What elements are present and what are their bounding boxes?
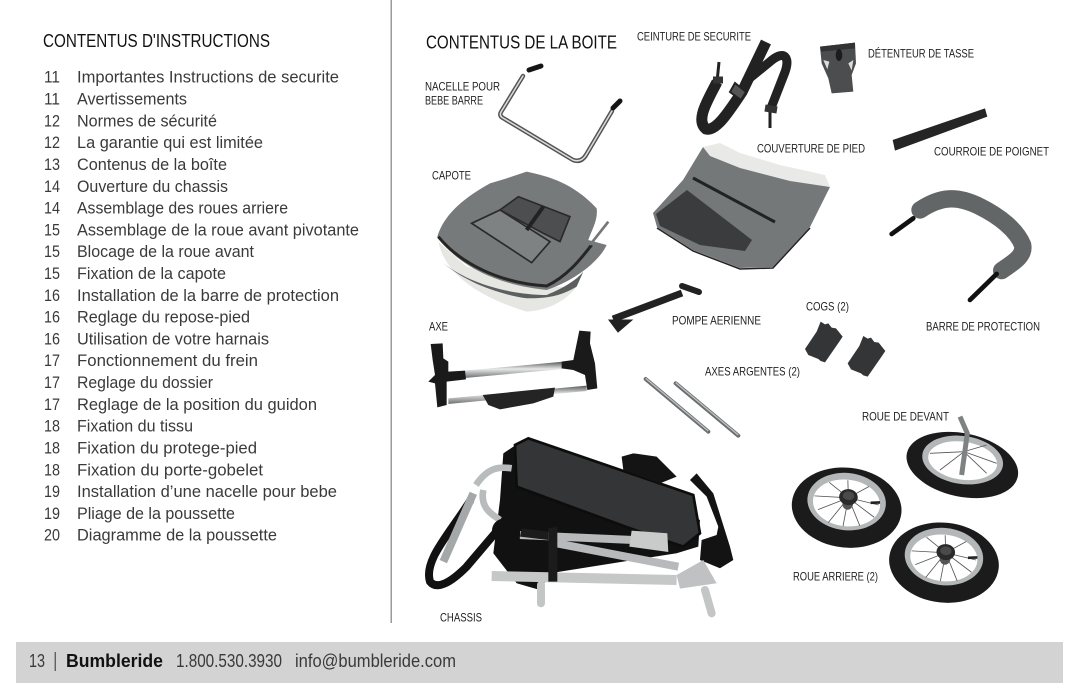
contents list: Fixation de la capote	[77, 264, 226, 283]
contents list: 12	[44, 133, 60, 152]
contents list: 15	[44, 242, 60, 261]
contents list: 13	[44, 155, 60, 174]
contents list: 19	[44, 482, 60, 501]
label: pompe aerienne: POMPE AERIENNE	[672, 314, 761, 328]
contents list: Reglage du repose-pied	[77, 308, 250, 327]
contents list: Reglage de la position du guidon	[77, 395, 317, 414]
label: nacelle pour bebe barre	[425, 80, 500, 108]
label: couverture de pied: COUVERTURE DE PIED	[757, 142, 865, 156]
contents list: 11	[44, 90, 60, 108]
phone number: 1.800.530.3930	[176, 651, 282, 671]
footer bar	[16, 642, 1063, 683]
icon: folded chassis	[429, 438, 733, 613]
contents list: Diagramme de la poussette	[77, 526, 277, 545]
contents list: Normes de sécurité	[77, 111, 217, 130]
label: roue de devant: ROUE DE DEVANT	[862, 410, 950, 424]
contents list: Pliage de la poussette	[77, 504, 235, 523]
contents list: Fixation du tissu	[77, 417, 193, 436]
label: capote: CAPOTE	[432, 168, 471, 182]
panel: table of contents	[43, 31, 359, 545]
contents list: Installation de la barre de protection	[77, 286, 339, 305]
heading: contentus de la boite: CONTENTUS DE LA BOITE	[426, 32, 617, 52]
contents list: 16	[44, 286, 60, 305]
contents list: 20	[44, 526, 60, 545]
contents list: Importantes Instructions de securite	[77, 68, 339, 87]
icon: rear wheel right	[885, 517, 1003, 608]
contents list: Blocage de la roue avant	[77, 242, 254, 261]
contents list: 15	[44, 220, 60, 239]
label: chassis: CHASSIS	[440, 610, 482, 624]
icon: wrist strap	[893, 108, 987, 151]
icon: air pump	[609, 286, 699, 332]
contents list: Assemblage des roues arriere	[77, 199, 288, 218]
label: detenteur de tasse: DÉTENTEUR DE TASSE	[868, 46, 974, 60]
contents list: 19	[44, 504, 60, 523]
icon: rear wheel left	[788, 462, 906, 553]
label: ceinture de securite: CEINTURE DE SECURITE	[637, 30, 751, 44]
contents list: Utilisation de votre harnais	[77, 329, 269, 348]
contents list: 17	[44, 373, 60, 392]
contents list: 14	[44, 177, 60, 196]
label: axes argentes: AXES ARGENTES (2)	[705, 364, 800, 378]
label: cogs: COGS (2)	[806, 300, 849, 314]
icon: foot cover	[653, 143, 830, 269]
contents list: La garantie qui est limitée	[77, 133, 263, 152]
contents list: 14	[44, 199, 60, 218]
label: nacelle pour bebe barre: NACELLE POUR	[425, 80, 500, 94]
label: barre de protection: BARRE DE PROTECTION	[926, 320, 1040, 334]
label: courroie de poignet: COURROIE DE POIGNET	[934, 144, 1050, 158]
contents list: 18	[44, 460, 60, 479]
contents list: Avertissements	[77, 90, 187, 108]
heading: contentus d'instructions: CONTENTUS D'INSTRUCTIONS	[43, 31, 270, 51]
brand name: Bumbleride	[66, 651, 163, 671]
icon: handlebar	[892, 199, 1023, 300]
contents list: Reglage du dossier	[77, 373, 213, 392]
contents list: 17	[44, 395, 60, 414]
label: roue arriere: ROUE ARRIERE (2)	[793, 570, 878, 584]
contents list: Fonctionnement du frein	[77, 351, 258, 370]
icon: safety harness	[702, 42, 787, 129]
contents list: Contenus de la boîte	[77, 155, 227, 174]
contents list: 15	[44, 264, 60, 283]
contents list: 16	[44, 308, 60, 327]
contents list: Fixation du protege-pied	[77, 438, 257, 458]
icon: axle	[428, 331, 597, 409]
contents list: 11	[44, 68, 60, 87]
label: axe: AXE	[429, 320, 448, 334]
label: nacelle pour bebe barre: BEBE BARRE	[425, 94, 483, 108]
contents list	[44, 68, 359, 545]
contents list: 12	[44, 111, 60, 130]
icon: canopy	[437, 172, 608, 312]
contents list: Ouverture du chassis	[77, 177, 228, 196]
email: info@bumbleride.com	[295, 651, 456, 671]
icon: cogs	[805, 322, 885, 377]
contents list: 18	[44, 438, 60, 458]
contents list: Assemblage de la roue avant pivotante	[77, 220, 359, 239]
page number: 13	[29, 651, 45, 671]
icon: baby carrier bar	[500, 66, 620, 161]
contents list: 16	[44, 329, 60, 348]
icon: cup holder	[820, 43, 856, 93]
contents list: 18	[44, 417, 60, 436]
icon: silver axles	[646, 378, 738, 436]
icon: wheels	[788, 417, 1024, 608]
contents list: 17	[44, 351, 60, 370]
icon: front wheel	[900, 417, 1024, 508]
contents list: Installation d’une nacelle pour bebe	[77, 482, 337, 501]
contents list: Fixation du porte-gobelet	[77, 460, 263, 479]
